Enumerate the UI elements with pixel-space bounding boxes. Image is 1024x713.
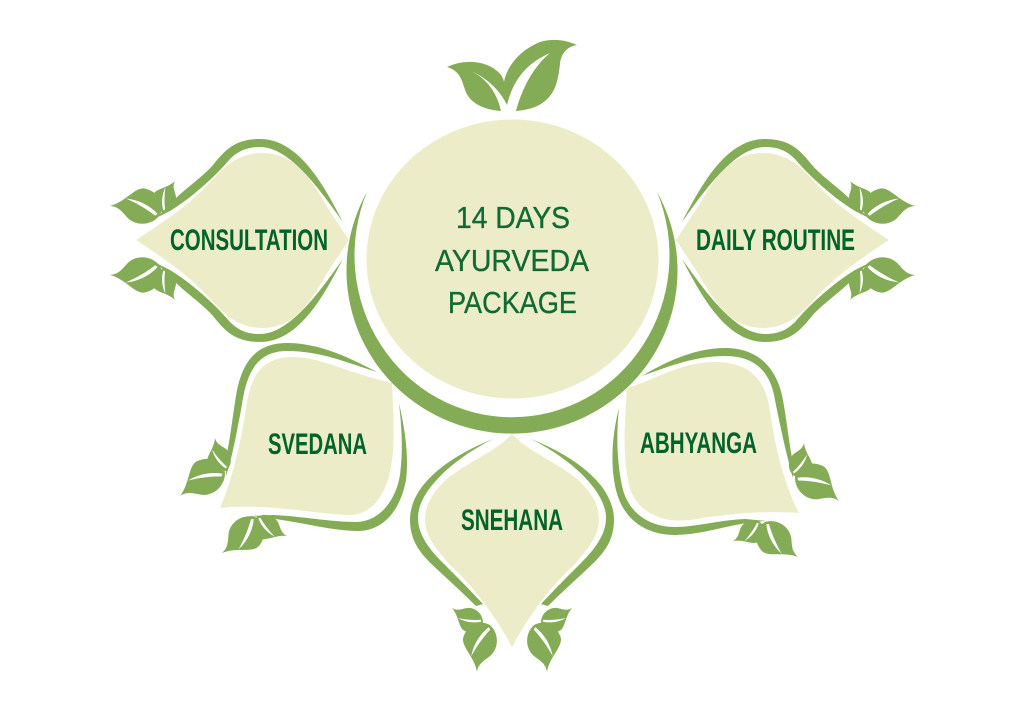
panel: abhyanga [612,348,850,572]
center disc [366,120,658,398]
center crescent [346,192,677,434]
panel: daily routine: DAILY ROUTINE [696,224,855,257]
panel: svedana [169,343,407,568]
panel: snehana: SNEHANA [461,504,563,537]
panel: snehana [410,434,614,675]
center title: AYURVEDA [435,243,589,278]
panel: consultation: CONSULTATION [170,224,328,257]
panel: center circle [346,120,677,434]
center title: PACKAGE [448,285,577,320]
center title [435,200,589,320]
center title: 14 DAYS [456,200,570,235]
panel: abhyanga: ABHYANGA [640,427,757,460]
panel: daily routine [676,139,917,342]
panel: consultation [108,139,349,342]
panel: svedana: SVEDANA [268,428,367,461]
icon: top leaves [447,40,577,111]
